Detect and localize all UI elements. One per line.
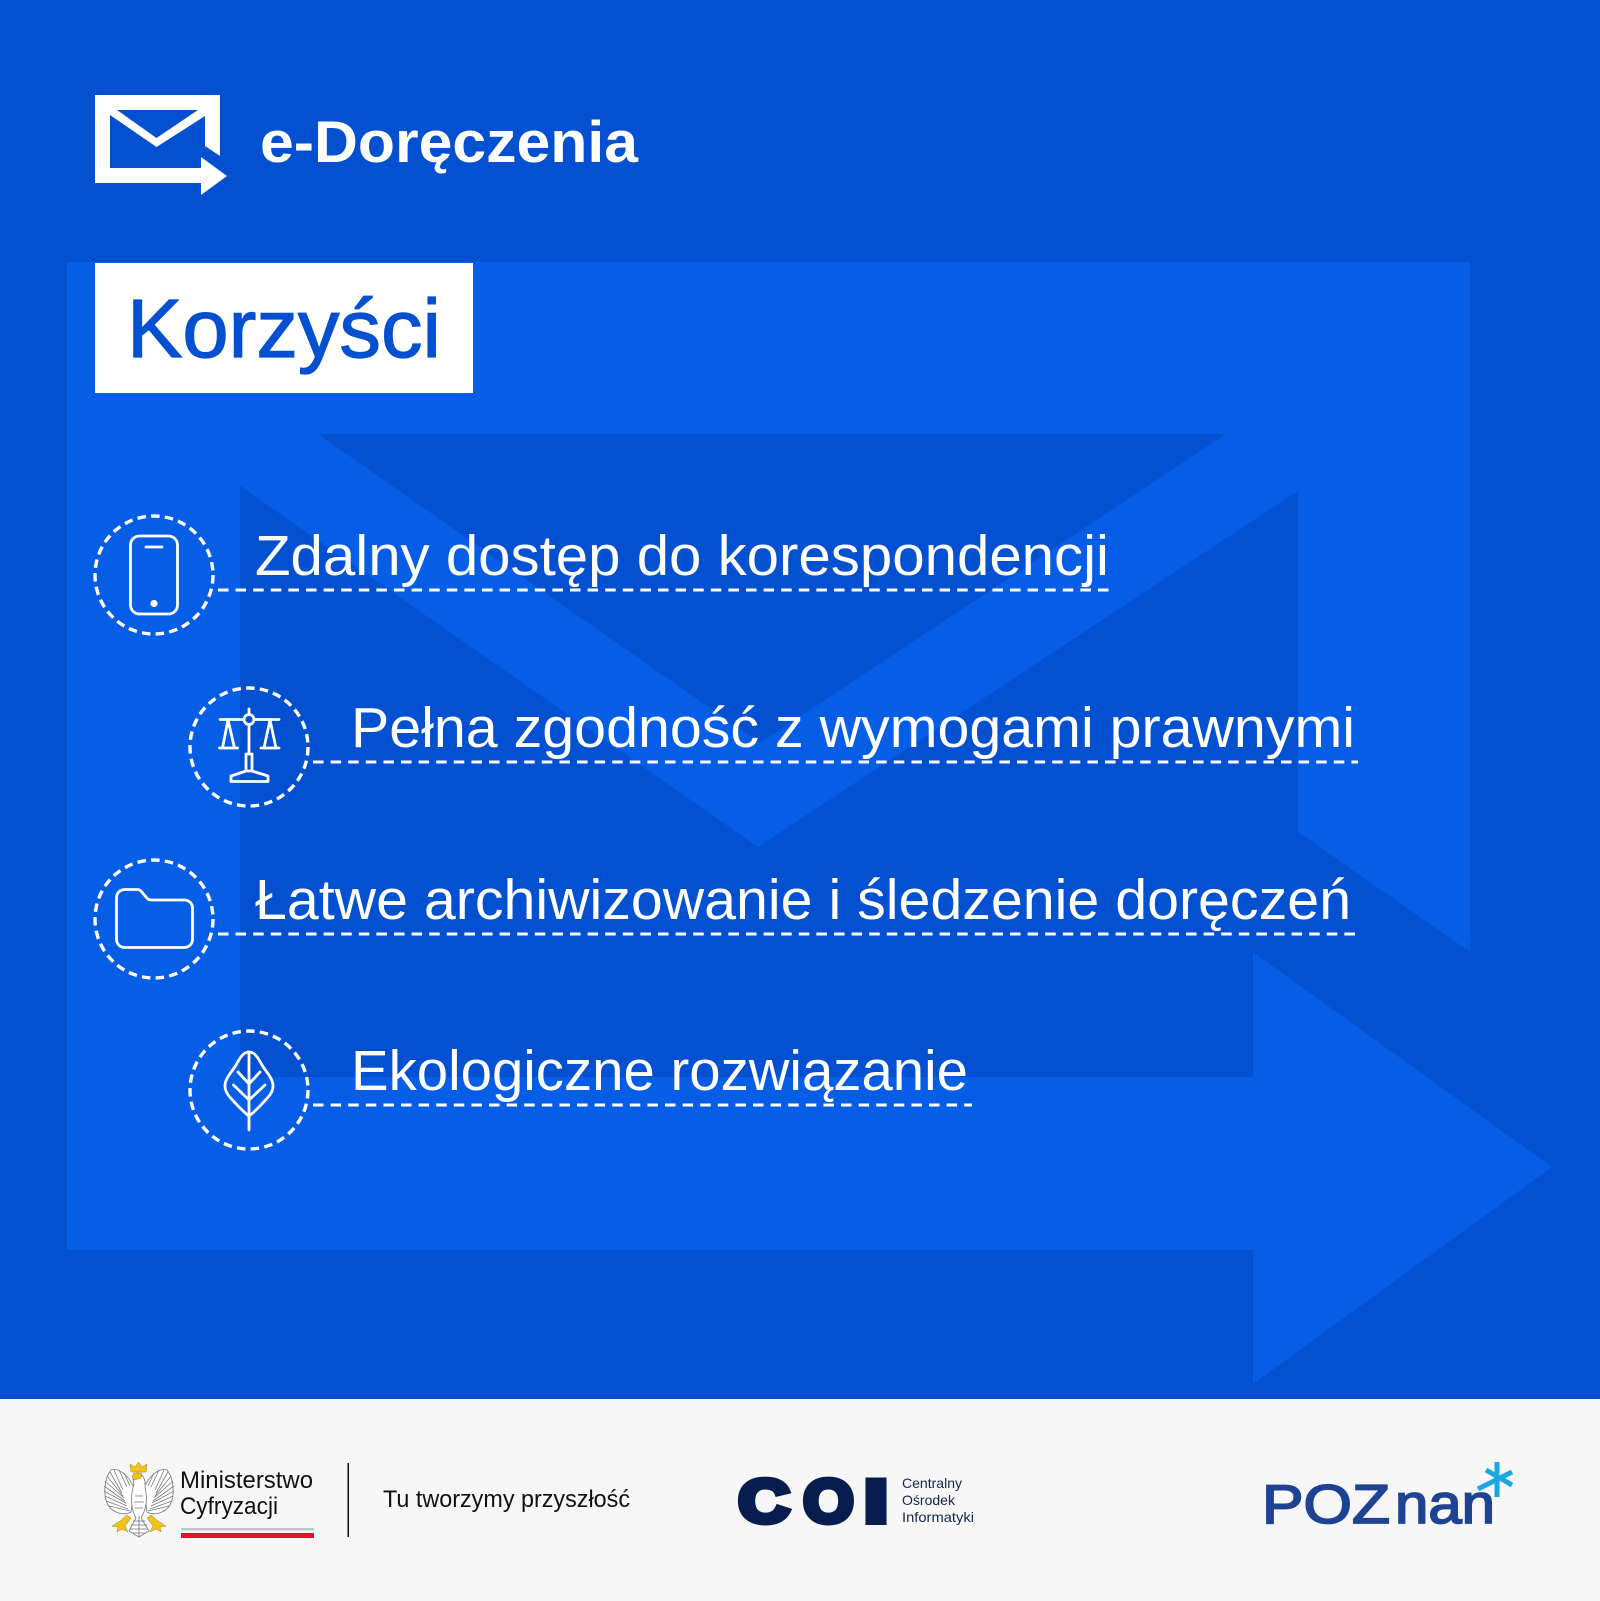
icon: envelope with arrow: [95, 95, 227, 195]
wordmark: COI: C: [738, 1468, 790, 1535]
heading: Korzyści: Korzyści: [127, 282, 441, 375]
dashed underline: [313, 1104, 972, 1106]
benefit text: Zdalny dostęp do korespondencji: [255, 524, 1109, 588]
background envelope arrow watermark: [67, 262, 1552, 1384]
benefit text: Ekologiczne rozwiązanie: [351, 1039, 968, 1103]
icon: white eagle: [104, 1462, 174, 1537]
logo: Poznań: nan: [1395, 1472, 1495, 1535]
icon: phone: [95, 516, 213, 634]
benefit text: Łatwe archiwizowanie i śledzenie doręczeń: [255, 868, 1351, 932]
dashed underline: [218, 932, 1356, 936]
logo: Ministerstwo Cyfryzacji: Cyfryzacji: [180, 1493, 278, 1520]
benefit 3: archiving and tracking: [95, 860, 1356, 978]
text: Centralny Ośrodek Informatyki: [902, 1475, 974, 1525]
text: Centralny Ośrodek Informatyki: Informatyki: [902, 1509, 974, 1525]
slogan: Tu tworzymy przyszłość: [383, 1486, 630, 1513]
logo: Ministerstwo Cyfryzacji: [104, 1462, 314, 1538]
icon: folder: [95, 860, 213, 978]
divider line: [348, 1463, 349, 1537]
benefit 1: remote access: [95, 516, 1113, 634]
title: e-Doręczenia: [260, 110, 639, 175]
flag stripe: [181, 1528, 314, 1538]
text: Centralny Ośrodek Informatyki: Centralny: [902, 1475, 962, 1491]
icon: blue asterisk: [1478, 1462, 1512, 1497]
benefit text: Pełna zgodność z wymogami prawnymi: [351, 696, 1355, 760]
benefit 2: legal compliance: [190, 688, 1358, 806]
heading: Korzyści: [95, 263, 473, 393]
wordmark: POZnan: POZ: [1262, 1473, 1390, 1535]
dashed underline: [218, 588, 1113, 592]
icon: scales: [190, 688, 308, 806]
benefit 4: ecological solution: [190, 1031, 972, 1149]
wordmark: COI: [738, 1468, 888, 1535]
logo: COI: [738, 1468, 974, 1535]
footer panel: [0, 1399, 1600, 1601]
icon: leaf: [190, 1031, 308, 1149]
dashed underline: [313, 760, 1358, 764]
text: Ministerstwo Cyfryzacji: Ministerstwo: [180, 1467, 313, 1494]
logo: Poznań: [1262, 1462, 1512, 1535]
text: Centralny Ośrodek Informatyki: Ośrodek: [902, 1492, 956, 1508]
wordmark: COI: O: [804, 1468, 854, 1535]
wordmark: COI: I: [864, 1468, 888, 1535]
